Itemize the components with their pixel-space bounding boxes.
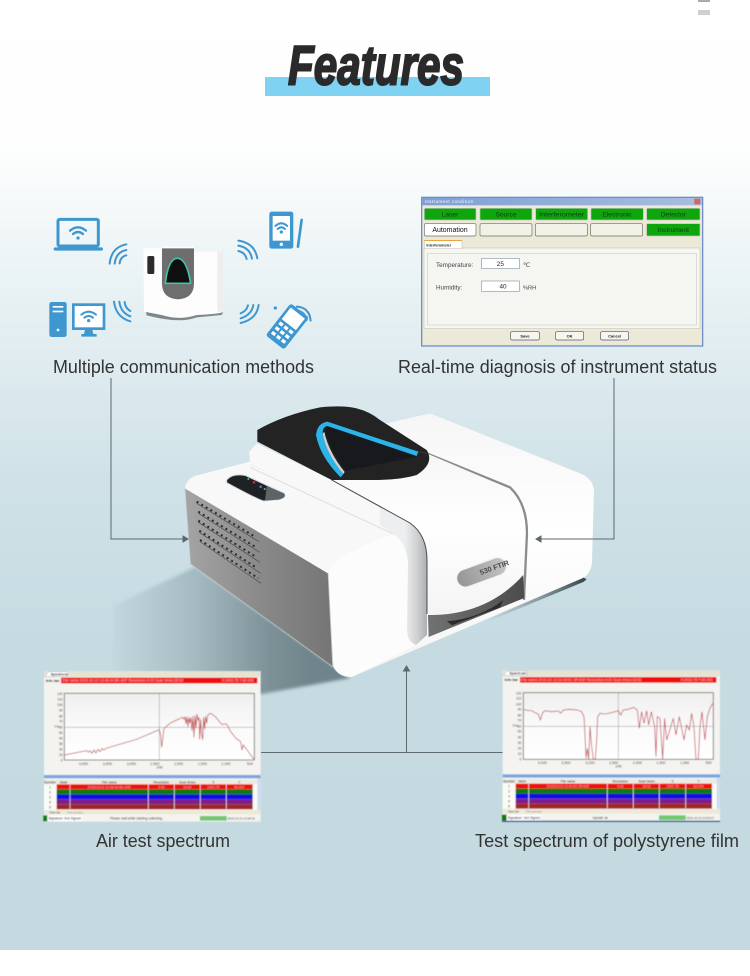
screenshot: air test spectrum: 70 bbox=[59, 720, 63, 724]
screenshot: polystyrene film spectrum: 90 bbox=[518, 708, 521, 712]
screenshot: polystyrene film spectrum: File name bbox=[561, 780, 575, 784]
title: Features: Features bbox=[288, 34, 464, 96]
screenshot: air test spectrum: View list bbox=[49, 811, 60, 815]
caption: real-time diagnosis: Real-time diagnosis of instrument status bbox=[398, 357, 717, 377]
screenshot: polystyrene film spectrum: 40 bbox=[518, 735, 521, 739]
screenshot: polystyrene film spectrum: 2015/10/13 13:49:51 SP.ASF bbox=[547, 785, 589, 789]
screenshot: air test spectrum: X bbox=[212, 780, 215, 784]
screenshot: air test spectrum: T% bbox=[54, 725, 60, 729]
screenshot: instrument condition dialog: 40 bbox=[499, 283, 507, 290]
arrow: right connector bbox=[536, 378, 614, 542]
screenshot: polystyrene film spectrum: 3,500 bbox=[561, 761, 571, 765]
screenshot: instrument condition dialog: Automation bbox=[432, 227, 468, 234]
screenshot: polystyrene film spectrum: Mark bbox=[519, 780, 526, 784]
screenshot: air test spectrum: 4,000 bbox=[79, 762, 88, 766]
screenshot: instrument condition dialog: Interferometer bbox=[426, 243, 452, 247]
screenshot: instrument condition dialog: Source bbox=[495, 211, 517, 218]
screenshot: air test spectrum: Scan times bbox=[179, 780, 196, 784]
arrow: left connector bbox=[111, 378, 188, 542]
screenshot: polystyrene film spectrum: 30 bbox=[518, 741, 521, 745]
icon: tablet and stylus bbox=[269, 212, 302, 249]
rear lid line bbox=[418, 452, 427, 453]
screenshot: air test spectrum: 60 bbox=[59, 725, 63, 729]
screenshot: air test spectrum: Info bar bbox=[46, 679, 60, 683]
screenshot: polystyrene film spectrum: 3,000 bbox=[585, 761, 595, 765]
lid blue accent bbox=[316, 422, 418, 477]
screenshot: polystyrene film spectrum: 120 bbox=[516, 691, 521, 695]
screenshot: polystyrene film spectrum bbox=[502, 670, 720, 822]
black lid bbox=[257, 406, 429, 480]
screenshot: air test spectrum: 32/32 bbox=[183, 785, 192, 789]
screenshot: polystyrene film spectrum: Update ok bbox=[593, 816, 608, 820]
top face crease bbox=[250, 464, 397, 534]
screenshot: polystyrene film spectrum: 32/32 bbox=[642, 785, 651, 789]
screenshot: polystyrene film spectrum: X:2402.75 Y:60.000 bbox=[681, 678, 713, 682]
screenshot: polystyrene film spectrum: 70 bbox=[518, 719, 521, 723]
screenshot: air test spectrum: 4 bbox=[49, 800, 51, 804]
screenshot: polystyrene film spectrum: T% bbox=[512, 724, 519, 728]
screenshot: air test spectrum: 0 bbox=[61, 758, 63, 762]
lid silver accent bbox=[323, 432, 345, 474]
screenshot: air test spectrum bbox=[43, 671, 261, 822]
screenshot: air test spectrum: 500 bbox=[247, 762, 253, 766]
screenshot: air test spectrum: 40 bbox=[59, 736, 63, 740]
front body bbox=[185, 462, 427, 677]
screenshot: polystyrene film spectrum: 2,000 bbox=[633, 761, 642, 765]
screenshot: polystyrene film spectrum: 4.00 bbox=[617, 785, 624, 789]
screenshot: polystyrene film spectrum: 80 bbox=[518, 713, 521, 717]
screenshot: air test spectrum: Signature: Not Signed bbox=[48, 817, 81, 821]
caption: multiple communication methods: Multiple communication methods bbox=[53, 357, 314, 377]
screenshot: polystyrene film spectrum: 60 bbox=[518, 724, 521, 728]
screenshot: polystyrene film spectrum: Scan times bbox=[638, 780, 655, 784]
signal arcs bbox=[110, 241, 259, 323]
screenshot: air test spectrum: Y bbox=[238, 780, 241, 784]
icon group: communication methods bbox=[49, 212, 311, 350]
screenshot: polystyrene film spectrum: 1,500 bbox=[656, 761, 666, 765]
icon: laptop bbox=[55, 219, 101, 249]
central cover bbox=[332, 453, 526, 614]
screenshot: polystyrene film spectrum: Signature: Not Signed bbox=[508, 816, 540, 820]
top face bbox=[185, 463, 400, 573]
screenshot: instrument condition dialog: Laser bbox=[442, 211, 459, 218]
screenshot: air test spectrum: 30 bbox=[59, 742, 63, 746]
screenshot: polystyrene film spectrum: 3 bbox=[508, 795, 510, 799]
screenshot: air test spectrum: 2,500 bbox=[150, 762, 160, 766]
screenshot: instrument condition dialog: ℃ bbox=[523, 262, 530, 269]
screenshot: air test spectrum: 3 bbox=[49, 795, 51, 799]
screenshot: air test spectrum: 54.007 bbox=[234, 785, 245, 789]
lid inner lens bbox=[325, 427, 415, 471]
screenshot: air test spectrum: 100 bbox=[57, 703, 63, 707]
silver band bbox=[380, 508, 427, 645]
screenshot: polystyrene film spectrum: Spectrum bbox=[509, 672, 527, 676]
screenshot: air test spectrum: 1/W bbox=[156, 766, 163, 770]
main instrument bbox=[185, 406, 594, 677]
screenshot: air test spectrum: 90 bbox=[59, 709, 63, 713]
screenshot: air test spectrum: 3,000 bbox=[127, 762, 136, 766]
screenshot: polystyrene film spectrum: Info bar bbox=[505, 678, 519, 682]
screenshot: polystyrene film spectrum: View list bbox=[508, 810, 519, 814]
screenshot: polystyrene film spectrum: 110 bbox=[516, 697, 521, 701]
screenshot: air test spectrum: 2015-10-13 13:48:32 bbox=[227, 817, 255, 821]
screenshot: air test spectrum: 2015/10/13 13:48:44 BK.ASF bbox=[88, 785, 131, 789]
screenshot: instrument condition dialog: Temperature: bbox=[436, 262, 474, 269]
screenshot: instrument condition dialog: Interferometer bbox=[539, 211, 585, 218]
screenshot: air test spectrum: 10 bbox=[59, 753, 63, 757]
arrow: bottom connector bbox=[261, 666, 503, 752]
screenshot: air test spectrum: 2 bbox=[49, 790, 51, 794]
screenshot: instrument condition dialog: Humidity: bbox=[436, 284, 463, 291]
screenshot: polystyrene film spectrum: 2402.75 bbox=[667, 785, 679, 789]
screenshot: polystyrene film spectrum: Y bbox=[698, 780, 701, 784]
vent rows bbox=[197, 502, 261, 583]
screenshot: air test spectrum: 2,000 bbox=[174, 762, 183, 766]
icon: mobile phone bbox=[266, 303, 311, 350]
screenshot: instrument condition dialog: Detector bbox=[661, 211, 687, 218]
screenshot: polystyrene film spectrum: File name:2015-10-13 13:49:51 SP.ASF Resolution:4.00 Scan times:32/32 bbox=[521, 678, 642, 682]
screenshot: polystyrene film spectrum: 20 bbox=[518, 746, 521, 750]
screenshot: polystyrene film spectrum: 4,000 bbox=[538, 761, 547, 765]
screenshot: air test spectrum: File name bbox=[102, 780, 117, 784]
screenshot: air test spectrum: 110 bbox=[57, 698, 63, 702]
screenshot: polystyrene film spectrum: 5 bbox=[508, 805, 510, 809]
screenshot: instrument condition dialog: Instrument bbox=[658, 227, 689, 234]
edge shadow bbox=[487, 577, 587, 621]
screenshot: polystyrene film spectrum: 500 bbox=[706, 761, 712, 765]
screenshot: polystyrene film spectrum: 2 bbox=[508, 790, 510, 794]
screenshot: polystyrene film spectrum: 1/W bbox=[615, 765, 622, 769]
screenshot: air test spectrum: 4.00 bbox=[158, 785, 165, 789]
screenshot: air test spectrum: 50 bbox=[59, 731, 63, 735]
screenshot: polystyrene film spectrum: Number bbox=[503, 780, 516, 784]
screenshot: air test spectrum: Please wait while starting collecting bbox=[110, 817, 162, 821]
control display bbox=[227, 475, 285, 501]
grey side panel bbox=[185, 488, 333, 667]
top scroll marks bbox=[698, 0, 710, 15]
caption: air test spectrum: Air test spectrum bbox=[96, 831, 230, 851]
screenshot: air test spectrum: File preview bbox=[67, 811, 84, 815]
screenshot: instrument condition dialog: OK bbox=[567, 333, 573, 338]
rear block bbox=[352, 413, 594, 677]
screenshot: air test spectrum: 1,500 bbox=[198, 762, 207, 766]
screenshot: air test spectrum: Resolution bbox=[153, 780, 169, 784]
screenshot: instrument condition dialog: Instrument condition bbox=[425, 199, 474, 204]
icon: desktop computer bbox=[49, 302, 104, 337]
screenshot: air test spectrum: Mark bbox=[60, 780, 68, 784]
screenshot: polystyrene film spectrum: X bbox=[672, 780, 675, 784]
right grey strip bbox=[427, 453, 527, 600]
model badge: 530 FTIR bbox=[478, 558, 511, 577]
screenshot: air test spectrum: 20 bbox=[59, 748, 63, 752]
screenshot: air test spectrum: Number bbox=[44, 780, 57, 784]
screenshot: air test spectrum: 1 bbox=[49, 785, 51, 789]
model badge bbox=[454, 554, 512, 590]
screenshot: polystyrene film spectrum: File preview bbox=[526, 810, 543, 814]
screenshot: instrument condition dialog: Electronic bbox=[602, 211, 632, 218]
screenshot: instrument condition dialog: %RH bbox=[523, 285, 536, 291]
screenshot: polystyrene film spectrum: 2,500 bbox=[609, 761, 618, 765]
screenshot: instrument condition dialog: 25 bbox=[497, 261, 504, 268]
screenshot: air test spectrum: 80 bbox=[59, 714, 63, 718]
screenshot: air test spectrum: X:2402.75 Y:60.000 bbox=[222, 679, 254, 683]
screenshot: polystyrene film spectrum: 1,000 bbox=[680, 761, 689, 765]
screenshot: polystyrene film spectrum: 10 bbox=[518, 752, 521, 756]
screenshot: air test spectrum: 2402.75 bbox=[207, 785, 219, 789]
white strip next to lid bbox=[249, 443, 410, 532]
screenshot: instrument condition dialog: Cancel bbox=[608, 333, 621, 338]
screenshot: air test spectrum: 120 bbox=[57, 692, 63, 696]
screenshot: air test spectrum: 5 bbox=[49, 805, 51, 809]
screenshot: air test spectrum: Spectrum bbox=[51, 673, 68, 677]
black edge line bbox=[332, 480, 427, 614]
sample opening bbox=[428, 575, 524, 637]
screenshot: polystyrene film spectrum: 100 bbox=[516, 702, 521, 706]
screenshot: air test spectrum: 1,000 bbox=[221, 762, 231, 766]
instrument shadow bbox=[113, 567, 350, 694]
screenshot: polystyrene film spectrum: 0 bbox=[519, 757, 521, 761]
caption: polystyrene film: Test spectrum of polystyrene film bbox=[475, 831, 739, 851]
screenshot: polystyrene film spectrum: 1 bbox=[508, 785, 510, 789]
screenshot: instrument condition dialog bbox=[422, 197, 703, 346]
screenshot: instrument condition dialog: Save bbox=[520, 333, 530, 338]
screenshot: air test spectrum: 3,500 bbox=[103, 762, 112, 766]
screenshot: polystyrene film spectrum: 50 bbox=[518, 730, 521, 734]
screenshot: air test spectrum: File name:2015-10-13 13:48:44 BK.ASF Resolution:4.00 Scan times:32/32 bbox=[63, 679, 183, 683]
screenshot: polystyrene film spectrum: Resolution bbox=[612, 780, 628, 784]
screenshot: polystyrene film spectrum: 4 bbox=[508, 800, 510, 804]
sample slot bbox=[447, 600, 503, 625]
screenshot: polystyrene film spectrum: 2015-10-13 13:50:27 bbox=[686, 816, 714, 820]
screenshot: polystyrene film spectrum: 63.049 bbox=[694, 785, 704, 789]
small instrument bbox=[143, 247, 223, 320]
